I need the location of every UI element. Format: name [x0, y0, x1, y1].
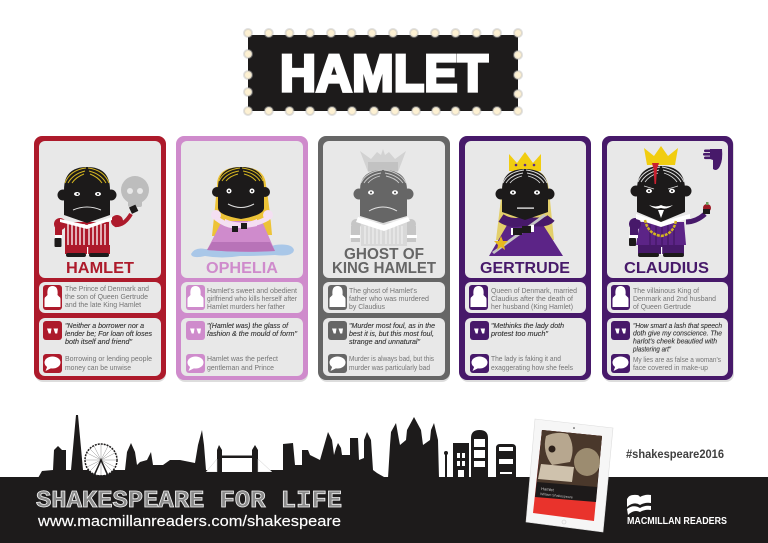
quote: "Murder most foul, as in the: [349, 321, 435, 330]
description: Claudius after the death of: [491, 294, 573, 303]
panel: Gertrude card: [459, 136, 591, 382]
meaning: money can be unwise: [65, 363, 131, 372]
book cover: Hamlet: [541, 486, 555, 492]
character: Gertrude with dagger: [489, 152, 563, 256]
meaning: murder was particularly bad: [349, 363, 430, 372]
description: The Prince of Denmark and: [65, 284, 149, 293]
icon: person: [328, 285, 347, 310]
icon: London Eye: [85, 444, 117, 476]
quote: [632, 321, 722, 354]
panel: Claudius card: [602, 136, 734, 382]
character: Hamlet with skull: [54, 167, 149, 257]
title text: HAMLET: [280, 45, 488, 103]
icon: speech bubble: [611, 354, 630, 373]
description: by Claudius: [349, 302, 385, 311]
description: Hamlet's sweet and obedient: [207, 286, 297, 295]
quote: [65, 321, 152, 346]
quote: "(Hamlet was) the glass of: [207, 321, 289, 330]
character: Ghost of King Hamlet: [350, 149, 417, 246]
description: her husband (King Hamlet): [491, 302, 573, 311]
footer band: [0, 477, 768, 543]
Macmillan Readers logo: [627, 495, 727, 527]
icon: quote: [470, 321, 489, 340]
description: [349, 286, 429, 311]
quote: strange and unnatural": [349, 337, 420, 346]
meaning: gentleman and Prince: [207, 363, 274, 372]
icon: speech bubble: [470, 354, 489, 373]
quote: "Methinks the lady doth: [491, 321, 564, 330]
description: and the late King Hamlet: [65, 300, 141, 309]
quote: fashion & the mould of form": [207, 329, 297, 338]
footer title: SHAKESPEARE FOR LIFE: [36, 488, 342, 515]
name: Claudius: CLAUDIUS: [624, 260, 709, 277]
description: father who was murdered: [349, 294, 429, 303]
footer URL: www.macmillanreaders.com/shakespeare: [37, 513, 341, 530]
description: [633, 286, 716, 311]
quote: best it is, but this most foul,: [349, 329, 434, 338]
icon: skyline windows: [457, 439, 513, 478]
description: girlfriend who kills herself after: [207, 294, 298, 303]
meaning: Hamlet was the perfect: [207, 354, 278, 363]
description: [491, 286, 577, 311]
icon: quote: [186, 321, 205, 340]
meaning: Borrowing or lending people: [65, 354, 152, 363]
description: Hamlet murders her father: [207, 302, 286, 311]
hashtag: #shakespeare2016: [626, 449, 724, 461]
character: Claudius with poison: [629, 146, 711, 257]
name: Ghost of King Hamlet: [332, 246, 436, 277]
name: Ghost of King Hamlet: KING HAMLET: [332, 260, 436, 277]
meaning: My lies are as false a woman's: [633, 355, 721, 364]
description: [207, 286, 298, 311]
icon: Tower Bridge: [206, 456, 272, 478]
title sign: [244, 29, 522, 115]
quote: lender be; For loan oft loses: [65, 329, 152, 338]
meaning: face covered in make-up: [633, 363, 708, 372]
character: Ophelia in water: [191, 167, 294, 258]
London skyline: [38, 415, 516, 478]
panel: Ophelia card: [176, 136, 308, 382]
panel: Ghost card: [318, 136, 450, 382]
icon: person: [611, 285, 630, 310]
description: The villainous King of: [633, 286, 699, 295]
name: Gertrude: GERTRUDE: [480, 260, 570, 277]
panel: Hamlet card: [34, 136, 166, 382]
meaning: Murder is always bad, but this: [349, 354, 434, 363]
quote: [490, 321, 564, 338]
icon: quote: [328, 321, 347, 340]
icon: speech bubble: [186, 354, 205, 373]
name: Ghost of King Hamlet: GHOST OF: [344, 246, 424, 263]
book cover: [533, 430, 602, 521]
meaning: The lady is faking it and: [491, 354, 561, 363]
icon: speech bubble: [328, 354, 347, 373]
meaning: [491, 354, 573, 372]
Macmillan Readers logo: MACMILLAN READERS: [627, 516, 727, 527]
quote: "Neither a borrower nor a: [65, 321, 144, 330]
quote: plastering art": [632, 344, 671, 354]
description: of Queen Gertrude: [633, 302, 691, 311]
tablet with book cover: [526, 419, 613, 532]
icon: quote: [43, 321, 62, 340]
name: Hamlet: HAMLET: [66, 260, 134, 277]
meaning: [207, 354, 278, 372]
meaning: exaggerating how she feels: [491, 363, 573, 372]
icon: person: [469, 285, 488, 310]
icon: person: [186, 285, 205, 310]
meaning: [349, 354, 434, 372]
quote: doth give my conscience. The: [633, 328, 722, 338]
meaning: [633, 355, 721, 372]
description: [65, 284, 149, 309]
icon: quote: [611, 321, 630, 340]
icon: person: [43, 285, 62, 310]
description: Queen of Denmark, married: [491, 286, 577, 295]
icon: thumbs down: [703, 149, 722, 170]
book cover: William Shakespeare: [540, 492, 573, 499]
description: The ghost of Hamlet's: [349, 286, 417, 295]
quote: both itself and friend": [65, 337, 132, 346]
icon: speech bubble: [43, 354, 62, 373]
meaning: [65, 354, 152, 372]
quote: protest too much": [490, 329, 548, 338]
description: Denmark and 2nd husband: [633, 294, 716, 303]
quote: [349, 321, 435, 346]
description: the son of Queen Gertrude: [65, 292, 148, 301]
quote: "How smart a lash that speech: [633, 321, 722, 330]
name: Ophelia: OPHELIA: [206, 260, 278, 277]
quote: [207, 321, 297, 338]
quote: harlot's cheek beautied with: [633, 336, 717, 346]
